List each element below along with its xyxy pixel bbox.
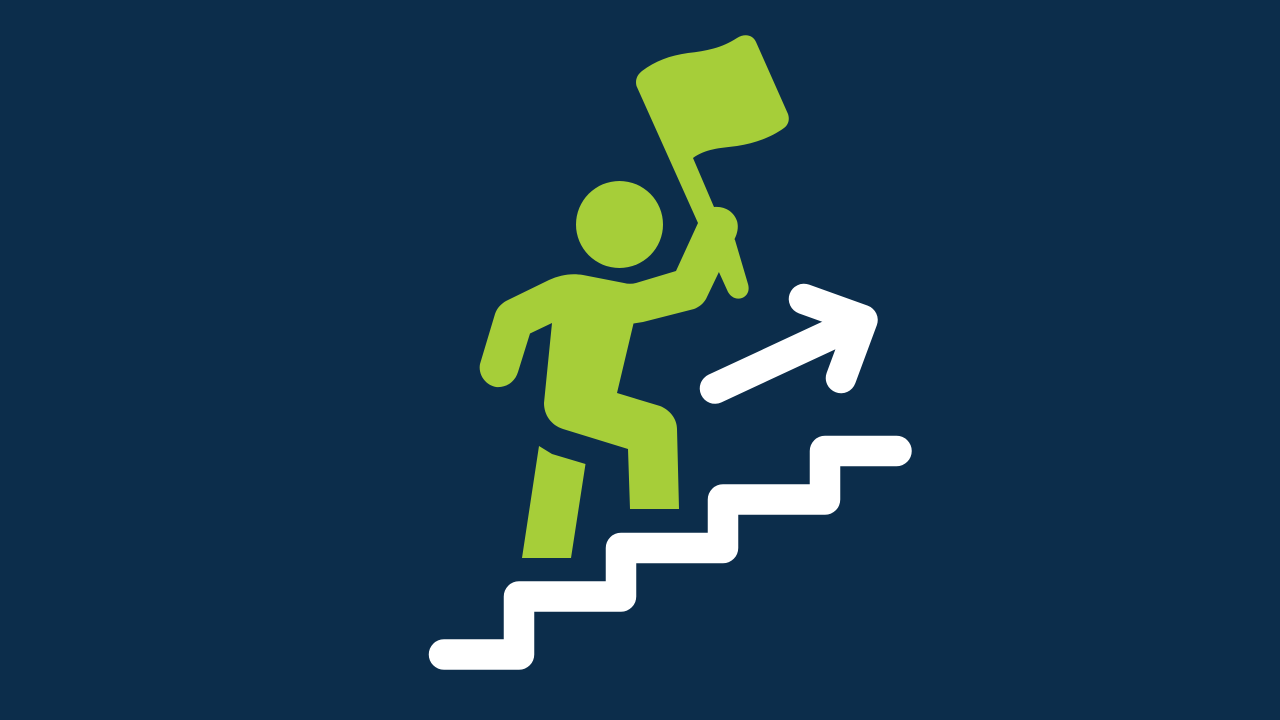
- flag cloth and pole: [636, 35, 789, 299]
- torso, arms, raised leg: [480, 207, 738, 509]
- head: [576, 181, 663, 268]
- icon: person with flag: [480, 35, 789, 558]
- icon: stairs: [444, 451, 896, 654]
- arrow: upward trend: [715, 299, 862, 388]
- lower leg: [522, 446, 586, 558]
